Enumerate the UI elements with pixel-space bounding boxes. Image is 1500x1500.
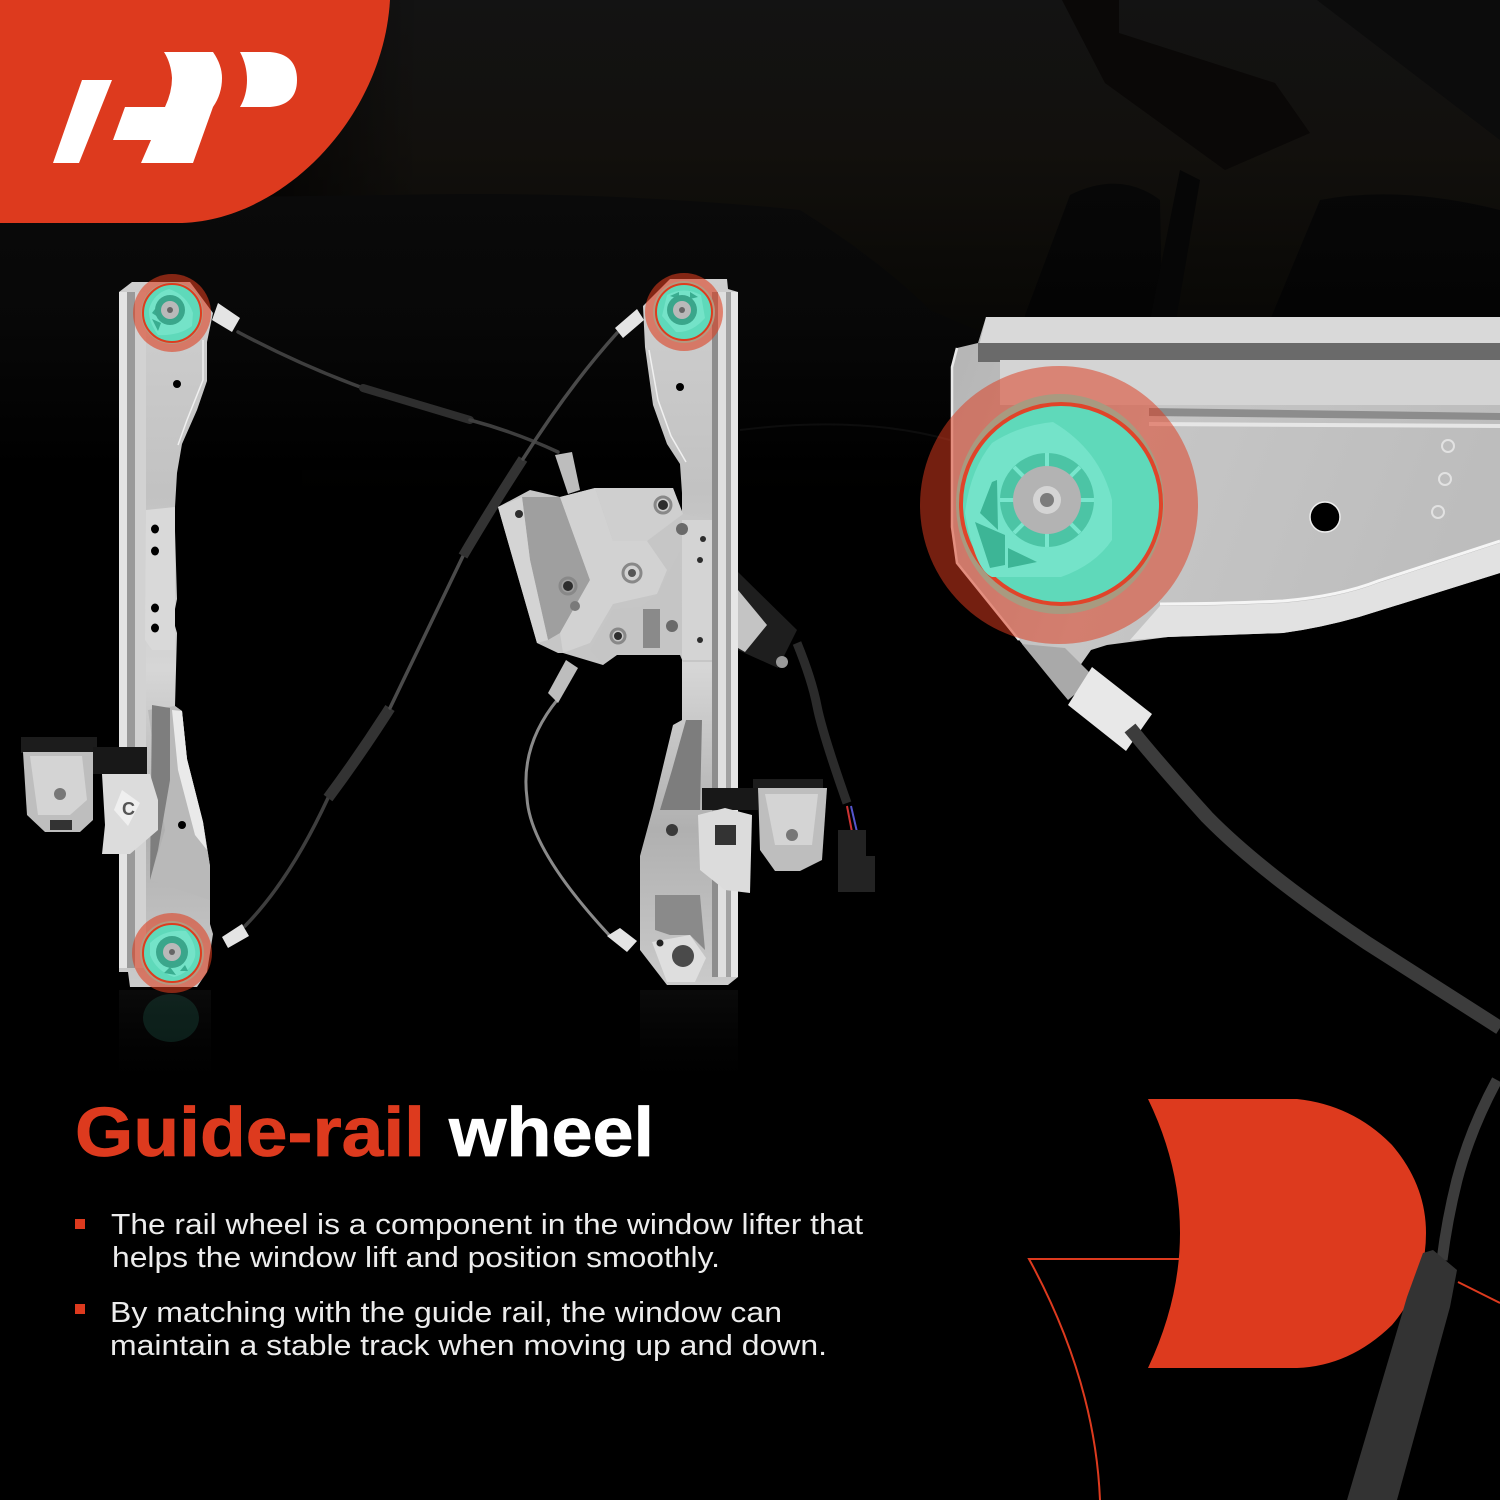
right window carrier bracket — [698, 779, 827, 893]
close-up: highlighted wheel — [920, 366, 1198, 644]
motor wire and connector — [797, 643, 875, 892]
heading: Guide-rail — [75, 1093, 425, 1171]
cables of the regulator — [238, 332, 617, 936]
right top clip — [615, 309, 644, 338]
highlighted wheel: right top — [645, 273, 723, 351]
reflections under the regulator — [119, 990, 738, 1080]
centre mechanism plate — [498, 452, 712, 703]
logo mark: A P — [53, 52, 297, 163]
close-up: cable clip — [1022, 644, 1152, 751]
bullet 2 marker — [75, 1304, 85, 1314]
close-up: cable — [1130, 728, 1500, 1028]
right rail — [640, 279, 738, 985]
close-up: rail plate — [952, 317, 1500, 690]
close-up: cable sheath — [1347, 1080, 1497, 1500]
left top clip — [212, 303, 240, 332]
bullet 1 line 1: The rail wheel is a component in the window lifter that — [111, 1209, 863, 1241]
bullet 1 marker — [75, 1219, 85, 1229]
left window carrier bracket: C — [122, 799, 135, 819]
bullet 2 line 1: By matching with the guide rail, the window can — [110, 1297, 782, 1329]
left bottom clip — [222, 924, 249, 948]
bullet list — [75, 1209, 863, 1362]
window motor — [738, 572, 797, 668]
red thin outline decoration — [1029, 1259, 1500, 1500]
highlighted wheel: left top — [133, 274, 211, 352]
mounting hole — [1310, 502, 1340, 532]
bullet 1 line 2: helps the window lift and position smoothly. — [112, 1242, 720, 1274]
red D decoration — [1148, 1099, 1426, 1368]
heading highlight: wheel — [448, 1093, 654, 1171]
left rail — [119, 282, 213, 987]
bullet 2 line 2: maintain a stable track when moving up and down. — [110, 1330, 827, 1362]
left window carrier bracket — [21, 737, 158, 854]
right bottom clip — [607, 928, 637, 952]
logo badge — [0, 0, 390, 223]
highlighted wheel: left bottom — [132, 913, 212, 993]
wheel hub plate — [965, 422, 1112, 577]
